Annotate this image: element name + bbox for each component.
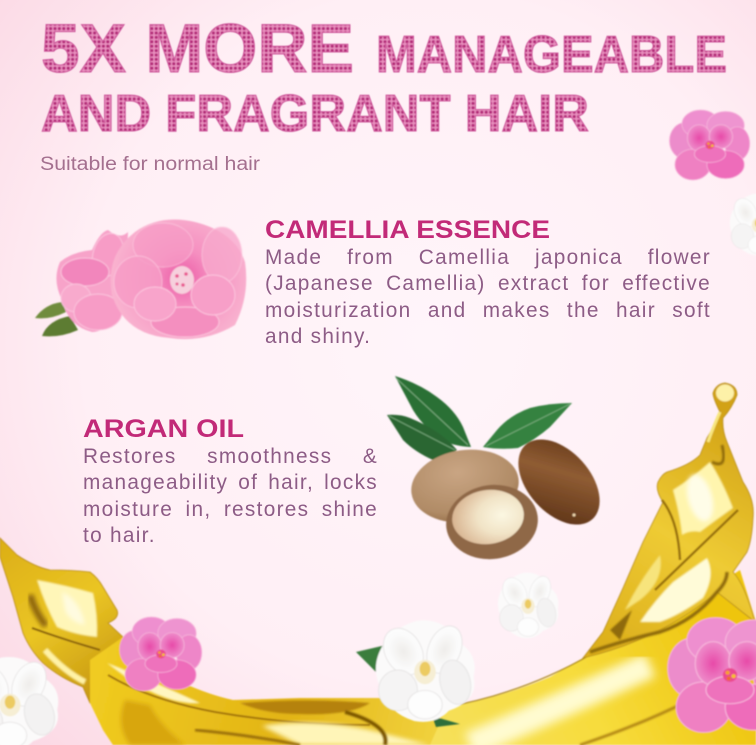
title: dotted headline: AND FRAGRANT HAIR [41,85,589,143]
left strand [0,538,140,703]
text block: argan oil description: manageability of hair, locks [83,471,378,494]
text block: camellia essence description: Made from Camellia japonica flower [265,246,711,269]
icon: large white camellia with leaves [356,620,475,727]
title: dotted headline: 5X MORE [41,10,354,87]
icon: camellia flower cluster [35,220,246,339]
title: dotted headline: MANAGEABLE [376,26,727,84]
title: dotted headline [41,10,727,143]
icon: cut-off white camellia on right edge [730,194,756,255]
subtitle: Suitable for normal hair [40,154,261,175]
icon: pink camellia on ribbon [119,617,202,691]
icon: top right pink camellia [669,110,750,180]
text block: argan oil description: to hair. [83,524,156,547]
text block: argan oil description: moisture in, restores shine [83,498,378,521]
icon: argan nuts and leaves [387,376,615,565]
text block: camellia essence description [265,246,711,348]
text block: argan oil description: Restores smoothness & [83,445,378,468]
icon: pink camellia bottom right [668,618,756,732]
text block: camellia essence description: and shiny. [265,325,371,348]
heading: camellia essence: CAMELLIA ESSENCE [265,216,550,244]
oil ribbon [0,383,756,745]
bottom middle band [90,637,470,745]
icon: white camellia, upper middle [498,573,559,638]
text block: camellia essence description: (Japanese Camellia) extract for effective [265,272,711,295]
icon: white camellia bottom left [0,657,59,745]
text block: camellia essence description: moisturization and makes the hair soft [265,299,711,322]
right belly [430,570,756,745]
heading: argan oil: ARGAN OIL [83,415,244,443]
text block: argan oil description [83,445,378,547]
right strand with splash [583,383,755,658]
